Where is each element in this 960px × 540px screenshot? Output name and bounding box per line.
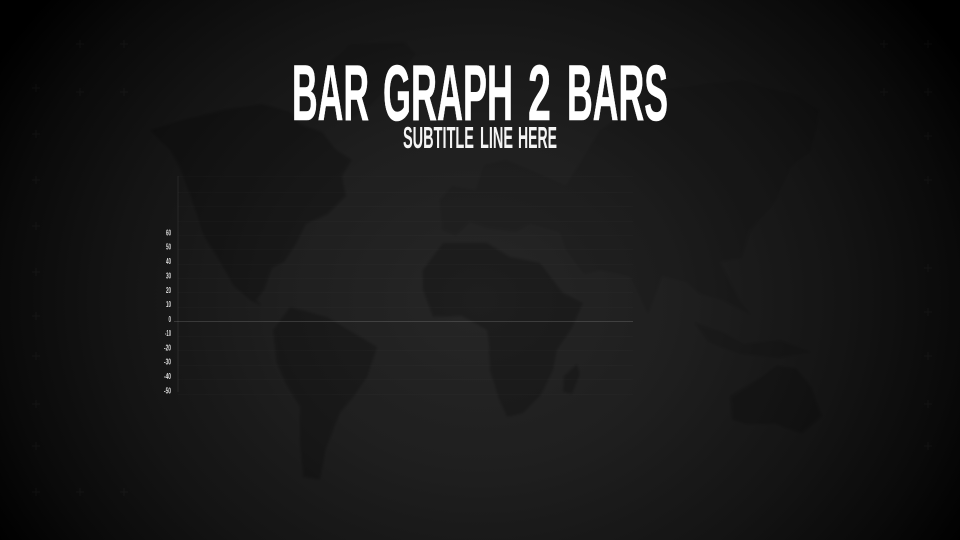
background plus-mark grid bbox=[32, 40, 932, 496]
y axis labels: 60 bbox=[166, 228, 171, 238]
y axis labels: 10 bbox=[166, 300, 171, 309]
y axis labels: 20 bbox=[166, 286, 171, 295]
north america bbox=[150, 104, 352, 306]
y axis labels: 50 bbox=[166, 242, 171, 252]
australia bbox=[730, 366, 822, 434]
infographic canvas: BARS bbox=[567, 48, 668, 137]
y axis line bbox=[177, 176, 179, 392]
south america bbox=[273, 307, 377, 480]
infographic canvas: HERE bbox=[518, 120, 557, 155]
y axis labels: 30 bbox=[166, 272, 171, 280]
title: BAR bbox=[292, 48, 369, 137]
greenland bbox=[326, 42, 416, 118]
indonesia islands bbox=[694, 322, 812, 358]
asia bbox=[560, 80, 820, 316]
y axis labels: -30 bbox=[164, 358, 171, 366]
y axis labels: -20 bbox=[164, 344, 171, 352]
y axis labels: -40 bbox=[164, 372, 171, 381]
subtitle: LINE bbox=[480, 120, 513, 155]
y axis labels: -10 bbox=[165, 329, 171, 338]
chart grid lines bbox=[178, 176, 633, 394]
world map silhouette bbox=[150, 42, 822, 480]
y axis labels: 0 bbox=[168, 315, 171, 324]
y axis labels: -50 bbox=[164, 386, 171, 396]
zero baseline bbox=[174, 320, 633, 322]
title: 2 bbox=[528, 48, 551, 137]
y axis labels bbox=[164, 228, 171, 396]
bar chart area bbox=[164, 176, 633, 396]
title: GRAPH bbox=[383, 48, 513, 137]
subtitle: SUBTITLE bbox=[403, 120, 474, 155]
europe bbox=[440, 160, 572, 236]
madagascar bbox=[563, 364, 580, 394]
y axis labels: 40 bbox=[166, 257, 171, 266]
africa bbox=[423, 243, 583, 417]
